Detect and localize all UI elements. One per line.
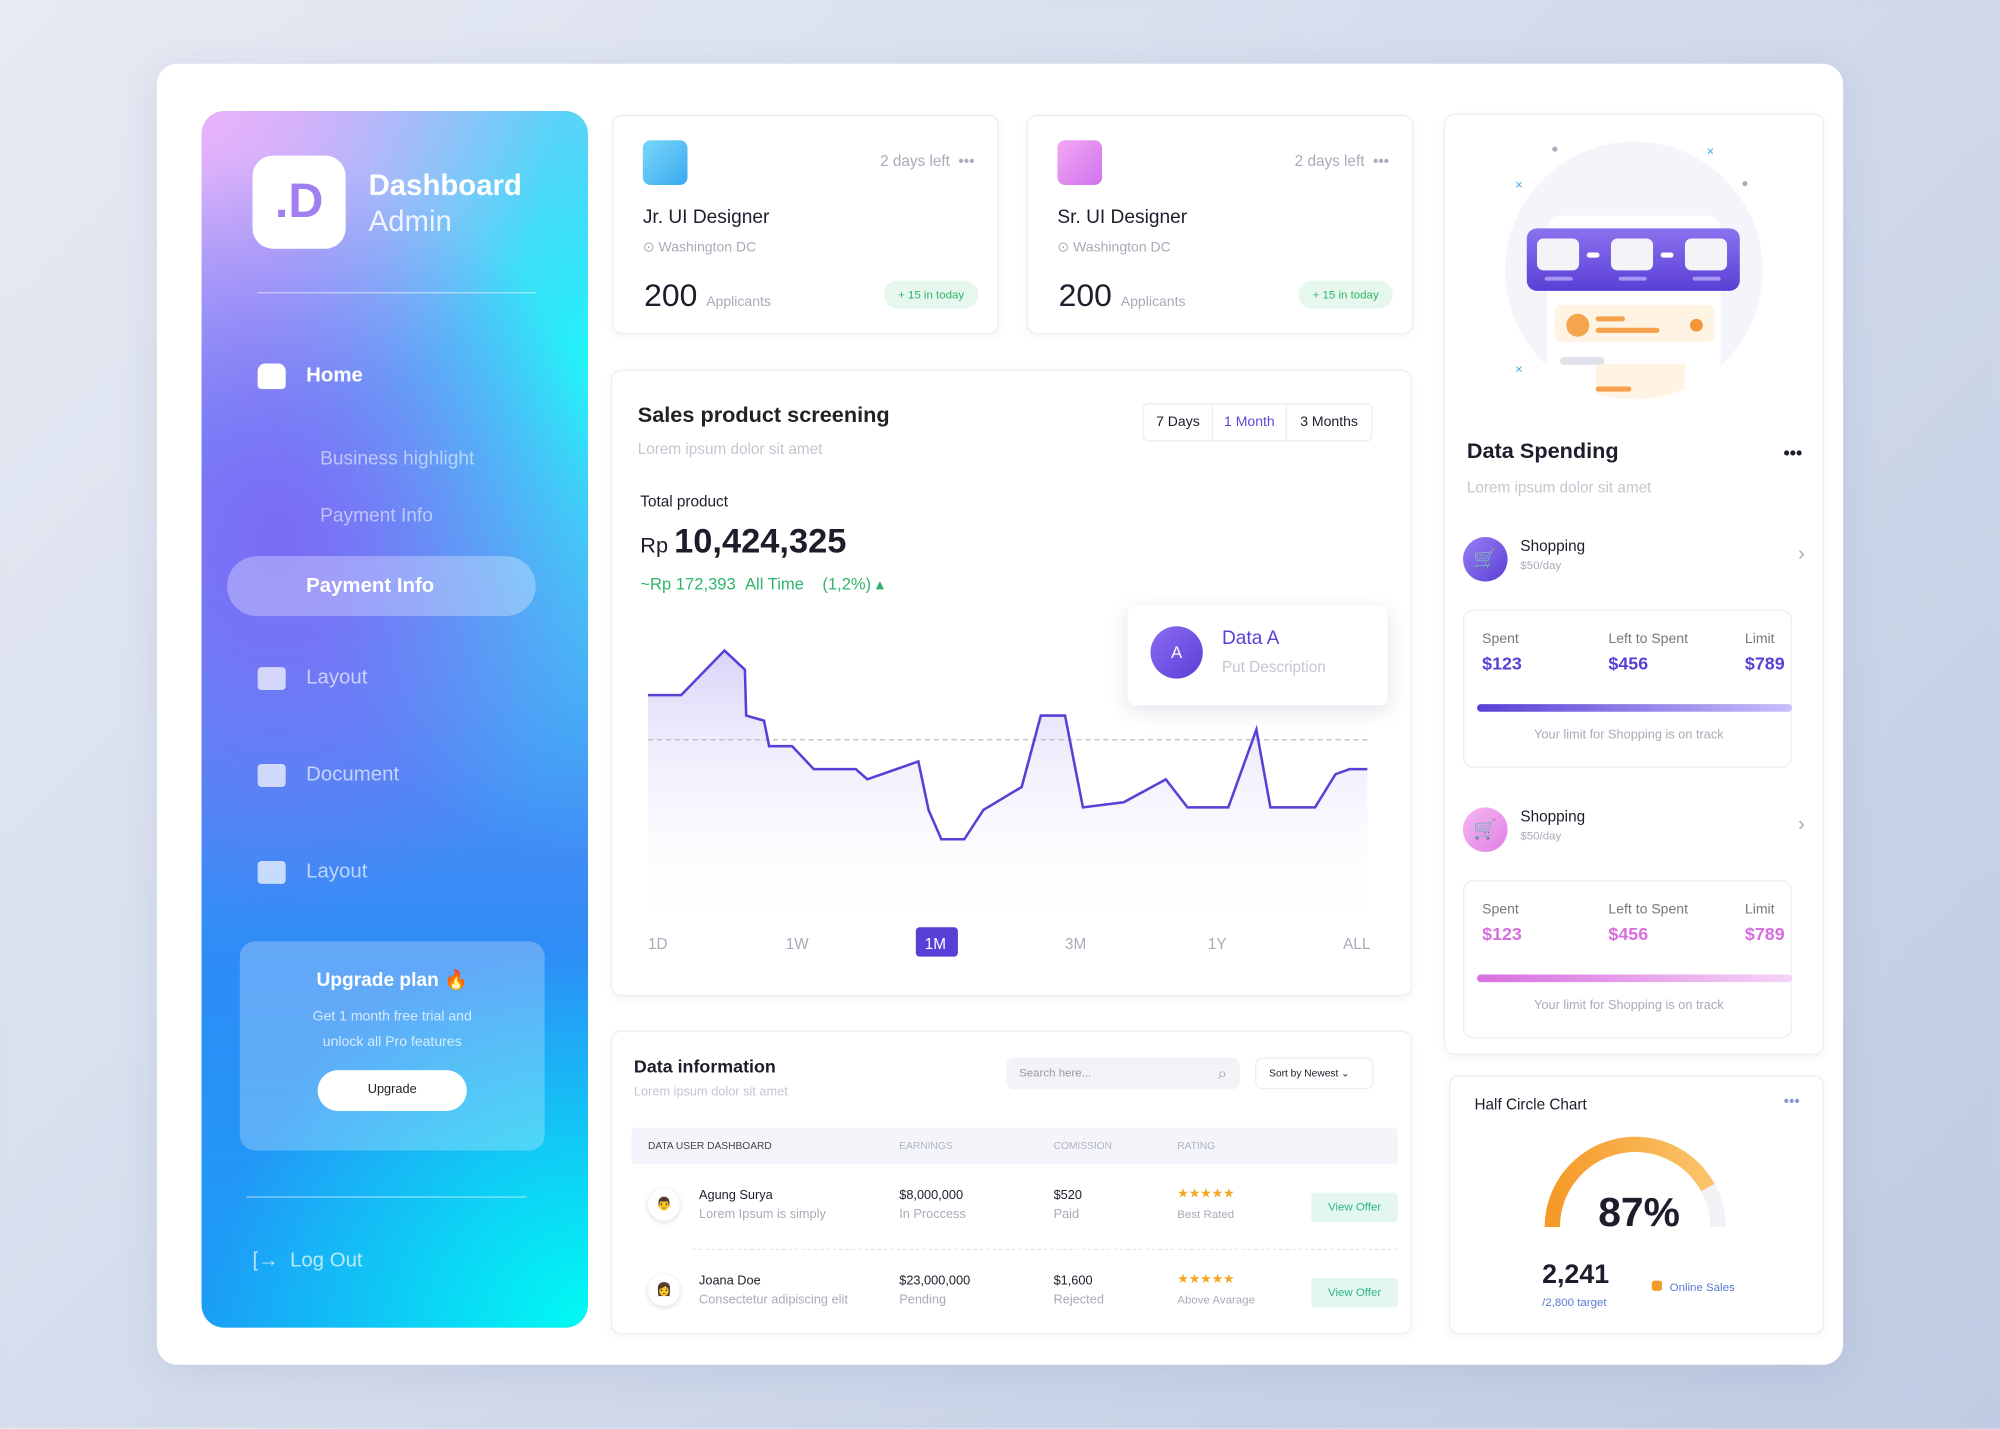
data spending panel: $50/day [1520, 559, 1561, 571]
job card 2 [1027, 115, 1413, 334]
tooltip [1128, 606, 1388, 705]
half circle chart panel: Half Circle Chart [1474, 1096, 1587, 1114]
half circle chart panel: ••• [1784, 1092, 1800, 1110]
data information table: ⌕ [1218, 1064, 1227, 1083]
row 1: $8,000,000 [899, 1189, 963, 1203]
time tabs: 7 Days [1156, 415, 1200, 430]
nav: others: Layout [306, 861, 367, 883]
row 1: 👨 [656, 1198, 672, 1212]
data information table [611, 1031, 1412, 1334]
job card 2: 2 days left ••• [1295, 152, 1389, 170]
data information table: COMISSION [1054, 1140, 1112, 1152]
nav: sub items: Payment Info [320, 505, 433, 527]
nav: home [258, 364, 363, 389]
job card 1: 200 Applicants [644, 278, 771, 314]
nav: active: Payment Info [306, 575, 434, 597]
row 2: Rejected [1054, 1293, 1104, 1307]
row 2: View Offer [1328, 1286, 1381, 1298]
illustration: × [1707, 144, 1714, 159]
logout: [→ Log Out [253, 1250, 363, 1272]
line chart: 1Y [1208, 936, 1227, 953]
data spending panel: $123 [1482, 653, 1522, 673]
half circle chart panel: 2,241 [1542, 1260, 1609, 1290]
data spending panel: Shopping [1520, 537, 1585, 555]
line chart: 1D [648, 936, 668, 953]
data spending panel: Limit [1745, 631, 1775, 647]
job card 2: Sr. UI Designer [1057, 207, 1187, 228]
data spending panel: Left to Spent [1608, 631, 1688, 647]
row 2: Above Avarage [1177, 1293, 1255, 1306]
row 1: In Proccess [899, 1208, 966, 1222]
brand text: Admin [369, 204, 452, 237]
row 1: Paid [1054, 1208, 1079, 1222]
brand text: Dashboard [369, 168, 522, 202]
row 2 [646, 1273, 1398, 1309]
data spending panel: Spent [1482, 902, 1519, 917]
job card 1: 2 days left ••• [880, 152, 974, 170]
data information table: DATA USER DASHBOARD [648, 1140, 772, 1152]
half circle chart panel: 87% [1598, 1189, 1680, 1235]
data spending panel: › [1798, 543, 1805, 565]
illustration: × [1515, 362, 1523, 377]
illustration [1505, 142, 1762, 400]
line chart: ALL [1343, 936, 1370, 953]
data spending panel: Your limit for Shopping is on track [1534, 999, 1724, 1013]
job card 2: + 15 in today [1313, 288, 1379, 301]
data spending panel: $456 [1608, 923, 1648, 944]
row 2: ★★★★★ [1177, 1273, 1234, 1287]
row 2: Consectetur adipiscing elit [699, 1293, 848, 1307]
time tabs [1143, 403, 1372, 441]
sales chart panel: ~Rp 172,393 All Time (1,2%) ▴ [640, 574, 884, 593]
data spending panel: Your limit for Shopping is on track [1534, 728, 1724, 742]
nav: sub items: Business highlight [320, 448, 474, 469]
data spending panel: $789 [1745, 923, 1785, 944]
job card 1: ⊙ Washington DC [643, 240, 756, 255]
row 2: Joana Doe [699, 1274, 761, 1288]
data spending panel: Lorem ipsum dolor sit amet [1467, 478, 1651, 496]
row 2: 👩 [656, 1283, 672, 1297]
logo [253, 156, 346, 249]
row 1: $520 [1054, 1189, 1082, 1203]
data spending panel: Limit [1745, 902, 1775, 917]
row 2: $23,000,000 [899, 1274, 970, 1288]
data spending panel: $456 [1608, 653, 1648, 673]
sales chart panel: Lorem ipsum dolor sit amet [638, 440, 822, 458]
tooltip: Put Description [1222, 658, 1326, 676]
line chart [648, 648, 1370, 957]
spending item 1 [1463, 537, 1508, 582]
nav: sub items [320, 448, 474, 527]
row 2: $1,600 [1054, 1274, 1093, 1288]
time tabs: 1 Month [1224, 415, 1275, 430]
data spending panel [1444, 114, 1824, 1055]
upgrade box: unlock all Pro features [323, 1034, 462, 1050]
data spending panel: Shopping [1520, 807, 1585, 825]
gauge [1544, 1136, 1726, 1228]
nav: others [258, 667, 399, 884]
nav: home: Home [306, 365, 363, 387]
sales chart panel [611, 370, 1412, 996]
illustration: × [1515, 177, 1523, 192]
line chart: 1W [786, 936, 809, 953]
data spending panel: $123 [1482, 923, 1522, 944]
sidebar [202, 111, 588, 1328]
data spending panel: ••• [1784, 443, 1802, 463]
upgrade box [240, 941, 545, 1151]
data spending panel: › [1798, 814, 1805, 835]
row 1: Best Rated [1177, 1208, 1234, 1221]
job card 2: 200 Applicants [1059, 278, 1186, 314]
sales chart panel: Total product [640, 492, 728, 510]
job card 1: + 15 in today [898, 288, 964, 301]
tooltip: A [1171, 643, 1182, 662]
data spending panel: $50/day [1520, 829, 1561, 842]
spending item 2: 🛒 [1473, 819, 1497, 841]
row 1 [646, 1187, 1398, 1224]
upgrade box: Get 1 month free trial and [313, 1009, 472, 1024]
data spending panel: Spent [1482, 631, 1519, 647]
row 1: ★★★★★ [1177, 1187, 1234, 1202]
sales chart panel: Sales product screening [638, 403, 890, 427]
spending item 2 [1463, 807, 1508, 852]
line chart: 3M [1065, 936, 1086, 953]
half circle chart panel [1449, 1075, 1824, 1334]
nav: others: Document [306, 764, 399, 786]
logo: .D [275, 175, 323, 228]
half circle chart panel: /2,800 target [1542, 1296, 1607, 1309]
upgrade box: Upgrade plan 🔥 [317, 969, 468, 991]
sales chart panel: Rp 10,424,325 [640, 522, 846, 560]
spending item 1: 🛒 [1473, 548, 1497, 570]
data information table: Lorem ipsum dolor sit amet [634, 1085, 788, 1099]
row 2: Pending [899, 1293, 946, 1307]
brand text [368, 168, 522, 237]
data spending panel: $789 [1745, 653, 1785, 673]
upgrade box: Upgrade [368, 1083, 417, 1097]
data information table: RATING [1177, 1140, 1215, 1152]
nav: active [227, 556, 536, 616]
tooltip: Data A [1222, 628, 1279, 649]
half circle chart panel: Online Sales [1670, 1281, 1735, 1293]
data information table: Sort by Newest ⌄ [1269, 1068, 1350, 1079]
data information table: Data information [634, 1056, 776, 1077]
row 1: Agung Surya [699, 1189, 773, 1203]
data spending panel: Data Spending [1467, 439, 1619, 463]
data information table: Search here... [1019, 1066, 1091, 1079]
nav: others: Layout [306, 667, 367, 689]
job card 1 [612, 115, 999, 334]
data information table: EARNINGS [899, 1140, 953, 1152]
row 1: Lorem Ipsum is simply [699, 1208, 826, 1222]
data spending panel: Left to Spent [1608, 902, 1688, 917]
job card 2: ⊙ Washington DC [1057, 240, 1171, 255]
main panel [157, 64, 1843, 1365]
row 1: View Offer [1328, 1200, 1381, 1213]
job card 1: Jr. UI Designer [643, 207, 769, 228]
line chart: 1M [925, 936, 946, 953]
time tabs: 3 Months [1300, 415, 1358, 430]
